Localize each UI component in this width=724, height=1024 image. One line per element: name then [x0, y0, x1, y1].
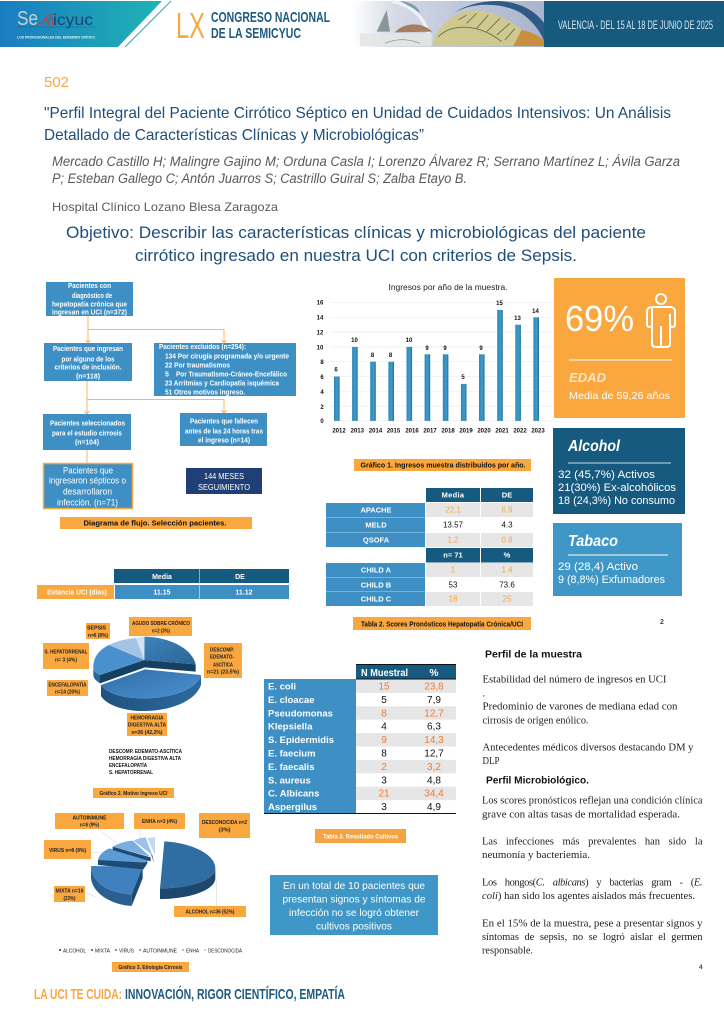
abstract number: 502: [44, 74, 69, 91]
y axis labels: 16: [317, 300, 324, 306]
box: selected patients: Pacientes seleccionados: [50, 420, 125, 428]
table: culture results: Pseudomonas: [268, 708, 333, 719]
flow connectors: [84, 316, 226, 463]
objective: cirrótico ingresado en nuestra UCI con criterios de Sepsis.: [135, 246, 577, 265]
pie legend: DESCONOCIDA: [208, 948, 242, 954]
y axis labels: 2: [320, 405, 324, 411]
box: septic patients: Pacientes que: [63, 466, 113, 476]
table: ICU stay: 11.12: [235, 590, 253, 596]
panel: alcohol: 21(30%) Ex-alcohólicos: [558, 482, 677, 494]
caption: chart 1: Gráfico 1. Ingresos muestra distribuidos por año.: [360, 462, 526, 470]
footer slogan: [34, 985, 345, 1003]
table: culture results: Aspergilus: [268, 802, 317, 813]
page number 4: 4: [699, 964, 703, 971]
table: culture results: E. faecium: [268, 748, 316, 760]
label: mixed: MIXTA n=16: [56, 888, 84, 894]
label: virus: [44, 840, 91, 859]
box: diagnosed patients: hepatopatía crónica que: [52, 302, 127, 308]
x axis labels: 2015: [387, 428, 401, 434]
box: early deaths: el ingreso (n=14): [198, 438, 250, 444]
text block: sample profile: .: [482, 688, 485, 700]
x axis labels: 2021: [495, 428, 509, 434]
text block: microbiological profile: Los scores pronósticos reflejan una condición clínica: [482, 796, 703, 806]
panel: age: EDAD: [569, 370, 607, 385]
table: culture results: C. Albicans: [268, 789, 319, 800]
label: encephalopathy: n=14 (20%): [55, 690, 80, 696]
bar value labels: 10: [406, 338, 413, 344]
table: culture results: 14,3: [424, 735, 444, 746]
y axis labels: 10: [317, 346, 324, 352]
text block: microbiological profile: [482, 776, 703, 956]
bar value labels: 6: [334, 368, 338, 374]
label: edemato-ascitic: DESCOMP.: [210, 648, 234, 654]
bar value labels: [334, 301, 539, 381]
table: culture results: 12,7: [424, 708, 444, 719]
x axis labels: 2020: [477, 428, 491, 434]
table: culture results: 34,4: [424, 789, 444, 800]
y axis labels: [317, 300, 324, 425]
x axis labels: 2013: [351, 428, 365, 434]
pie legend: VIRUS: [119, 948, 134, 954]
text block: microbiological profile: neumonía y bacteriemia.: [482, 850, 590, 861]
table: culture results: 23,8: [424, 682, 444, 692]
label: acute on chronic: [129, 617, 192, 636]
authors: P; Esteban Gallego C; Antón Juarros S; Castrillo Guiral S; Zalba Etayo B.: [52, 171, 467, 186]
box: septic patients: [44, 464, 132, 508]
table: prognostic scores: 0.8: [501, 536, 513, 544]
y axis labels: 12: [317, 330, 324, 336]
panel: age: Media de 59,26 años: [569, 390, 670, 402]
label: edemato-ascitic: EDEMATO-: [210, 654, 234, 660]
x axis labels: 2023: [531, 428, 545, 434]
y axis labels: 6: [320, 375, 324, 381]
label: sepsis: SEPSIS: [87, 626, 106, 632]
table: prognostic scores: [326, 488, 533, 606]
authors: Mercado Castillo H; Malingre Gajino M; Orduna Casla I; Lorenzo Álvarez R; Serrano Martínez L; Ávila Garza: [52, 154, 680, 169]
panel: age: 69%: [565, 298, 634, 339]
box: excluded patients: [154, 343, 296, 396]
table: culture results: 3: [381, 802, 387, 813]
label: upper GI bleed: [127, 713, 167, 736]
callout: negative cultures: presentan signos y síntomas de: [282, 894, 426, 906]
label: acute on chronic: AGUDO SOBRE CRÓNICO: [132, 619, 191, 627]
caption: table 2: [353, 617, 531, 630]
table: prognostic scores: 1.4: [501, 566, 513, 574]
table: culture results: 2: [381, 762, 387, 773]
text block: sample profile: Perfil de la muestra: [485, 650, 582, 660]
x axis labels: 2014: [369, 428, 383, 434]
pie legend: [59, 948, 242, 954]
bar value labels: 8: [371, 353, 375, 359]
table: culture results: Klepsiella: [268, 722, 313, 733]
table: culture results: 4,9: [427, 802, 441, 813]
table: culture results: 4,8: [427, 775, 441, 786]
box: excluded patients: Por Traumatismo-Cráneo-Encefálico: [176, 372, 287, 378]
text block: microbiological profile: síntomas de sepsis, no se logró aislar el germen: [482, 932, 703, 943]
text block: sample profile: Antecedentes médicos diversos destacando DM y: [482, 742, 694, 754]
table: culture results: S. aureus: [268, 775, 311, 786]
table: prognostic scores: 53: [449, 580, 458, 590]
y axis labels: 14: [317, 316, 324, 322]
y axis labels: 0: [320, 419, 324, 425]
congress title: CONGRESO NACIONAL: [211, 9, 330, 26]
header photo: [352, 1, 544, 47]
table: culture results: S. Epidermidis: [268, 735, 334, 746]
label: autoimmune: n=6 (9%): [80, 822, 99, 828]
text block: microbiological profile: grave con altas tasas de mortalidad esperada.: [482, 810, 680, 820]
x axis labels: 2022: [513, 428, 527, 434]
label: NASH: [134, 813, 185, 829]
caption: table 3: Tabla 3. Resultado Cultivos: [323, 834, 398, 840]
label: virus: VIRUS n=8 (9%): [49, 848, 86, 854]
table: prognostic scores: APACHE: [360, 506, 392, 514]
box: excluded patients: 22 Por traumatismos: [165, 362, 230, 370]
congress title: DE LA SEMICYUC: [211, 25, 301, 42]
box: early deaths: antes de las 24 horas tras: [185, 428, 263, 436]
label: edemato-ascitic: n=21 (23,5%): [207, 670, 239, 676]
text block: sample profile: Estabilidad del número de ingresos en UCI: [482, 674, 667, 686]
table: culture results: [264, 664, 456, 814]
label: upper GI bleed: n=26 (42,2%): [132, 730, 163, 736]
bars: [334, 310, 539, 421]
bar value labels: 9: [443, 346, 447, 352]
title: Detallado de Características Clínicas y Microbiológicas”: [44, 127, 424, 144]
caption: flow diagram: [60, 517, 252, 529]
panel: tobacco: [553, 523, 682, 596]
table: ICU stay: DE: [235, 574, 245, 581]
congress title: LX: [176, 5, 205, 46]
callout: negative cultures: cultivos positivos: [316, 920, 392, 932]
x axis labels: 2017: [423, 428, 437, 434]
table: prognostic scores: MELD: [365, 520, 387, 530]
pie legend text: S. HEPATORRENAL: [109, 770, 153, 776]
x axis labels: 2019: [459, 428, 473, 434]
caption: chart 1: [354, 459, 531, 471]
table: ICU stay: 11.15: [153, 590, 171, 596]
pie chart: ICU admission reason: [43, 617, 242, 776]
box: inclusion criteria: Pacientes que ingresan: [53, 346, 123, 353]
box: diagnosed patients: Pacientes con: [68, 283, 111, 290]
label: sepsis: n=6 (8%): [88, 633, 108, 639]
label: alcohol: ALCOHOL n=36 (52%): [186, 910, 235, 916]
text block: sample profile: [482, 650, 694, 767]
icon: person: [647, 294, 675, 347]
pie legend: ALCOHOL: [63, 948, 86, 954]
caption: table 2: Tabla 2. Scores Pronósticos Hepatopatía Crónica/UCI: [361, 622, 523, 628]
congress logo panel: LOS PROFESIONALES DEL ENFERMO CRÍTICO: [17, 34, 96, 40]
label: hepatorenal: S. HEPATORRENAL: [44, 650, 88, 656]
table: prognostic scores: QSOFA: [363, 536, 390, 544]
label: sepsis: [86, 623, 110, 639]
bar value labels: 5: [461, 375, 465, 381]
table: prognostic scores: 4.3: [501, 520, 513, 530]
text block: sample profile: cirrosis de origen enólico.: [482, 716, 588, 726]
box: inclusion criteria: por alguno de los: [62, 356, 115, 364]
box: diagnosed patients: [46, 282, 133, 316]
table: ICU stay: Estancia UCI (días): [47, 590, 107, 596]
table: culture results: E. cloacae: [268, 695, 314, 706]
table: culture results: 4: [381, 722, 387, 733]
text block: sample profile: DLP: [482, 756, 500, 767]
callout: negative cultures: En un total de 10 pacientes que: [283, 880, 425, 892]
label: upper GI bleed: DIGESTIVA ALTA: [128, 722, 166, 728]
text block: sample profile: Predominio de varones de mediana edad con: [482, 702, 678, 712]
title: "Perfil Integral del Paciente Cirrótico Séptico en Unidad de Cuidados Intensivos: Un Análisis: [44, 105, 671, 122]
box: follow-up: SEGUIMIENTO: [198, 483, 250, 492]
pie chart: cirrhosis etiology: [44, 813, 250, 954]
table: ICU stay: Media: [152, 574, 172, 581]
table: culture results: 6,3: [427, 722, 441, 733]
title: [44, 105, 671, 144]
bar value labels: 14: [532, 309, 539, 315]
label: acute on chronic: n=2 (3%): [152, 628, 170, 634]
bar value labels: 15: [496, 301, 503, 307]
congress title: [176, 5, 330, 46]
pie legend text: DESCOMP. EDEMATO-ASCÍTICA: [109, 747, 183, 755]
box: inclusion criteria: (n=118): [76, 374, 100, 380]
table: prognostic scores: 6.9: [501, 506, 513, 514]
table: prognostic scores: DE: [502, 490, 512, 500]
table: culture results: 3: [381, 775, 387, 786]
bar value labels: 8: [389, 353, 393, 359]
objective: [66, 223, 646, 265]
table: prognostic scores: CHILD C: [361, 594, 392, 604]
box: selected patients: (n=104): [75, 440, 99, 446]
footer slogan: LA UCI TE CUIDA:: [34, 986, 122, 1003]
table: prognostic scores: 13.57: [443, 520, 464, 530]
table: culture results: 8: [381, 748, 387, 760]
panel: alcohol: [553, 428, 685, 514]
box: diagnosed patients: diagnóstico de: [72, 293, 112, 300]
panel: tobacco: 29 (28,4) Activo: [558, 561, 638, 573]
panel: age: [554, 278, 685, 418]
bar value labels: 13: [514, 316, 521, 322]
text block: microbiological profile: Perfil Microbiológico.: [486, 776, 589, 786]
table: prognostic scores: 25: [503, 594, 512, 604]
pie legend: ENHA: [186, 948, 199, 954]
box: follow-up: 144 MESES: [204, 472, 244, 481]
label: encephalopathy: [47, 680, 88, 696]
table: ICU stay: [37, 569, 289, 599]
table: prognostic scores: 22.1: [445, 506, 461, 514]
text block: microbiological profile: responsable.: [482, 946, 533, 956]
callout: negative cultures: infección no se logró obtener: [289, 907, 419, 919]
label: autoimmune: [55, 813, 124, 829]
x axis labels: 2012: [332, 428, 346, 434]
table: culture results: 9: [381, 735, 387, 746]
bar value labels: 9: [479, 346, 483, 352]
label: alcohol: [174, 906, 246, 917]
table: culture results: E. faecalis: [268, 762, 314, 773]
table: culture results: E. coli: [268, 682, 296, 692]
box: excluded patients: 23 Arritmias y Cardiopatía isquémica: [165, 380, 279, 388]
label: unknown: DESCONOCIDA n=2: [202, 820, 247, 826]
table: prognostic scores: CHILD B: [361, 580, 392, 590]
pie legend text: ENCEFALOPATÍA: [109, 761, 148, 769]
3D pie: [85, 828, 217, 907]
box: excluded patients: 51 Otros motivos ingreso.: [165, 390, 245, 396]
x axis labels: [332, 428, 545, 434]
label: hepatorenal: [43, 643, 89, 669]
congress date panel: [544, 1, 724, 47]
table: prognostic scores: 73.6: [499, 580, 515, 590]
congress logo panel: icyuc: [53, 12, 93, 29]
text block: microbiological profile: Las infecciones más prevalentes han sido la: [482, 836, 703, 848]
congress logo panel: Se: [17, 8, 38, 30]
table: culture results: 15: [378, 682, 390, 692]
text block: microbiological profile: coli) han sido los agentes aislados más frecuentes.: [482, 891, 695, 902]
header banner: [0, 0, 724, 47]
table: prognostic scores: 1: [451, 566, 456, 574]
label: encephalopathy: ENCEFALOPATÍA: [48, 680, 86, 688]
objective: Objetivo: Describir las características clínicas y microbiológicas del paciente: [66, 223, 646, 242]
pie legend: MIXTA: [95, 948, 110, 954]
caption: chart 3: [112, 962, 189, 972]
box: diagnosed patients: ingresan en UCI (n=372): [52, 310, 127, 316]
label: autoimmune: AUTOINMUNE: [72, 816, 107, 822]
label: unknown: (3%): [219, 828, 231, 834]
bar value labels: 9: [425, 346, 429, 352]
callout: negative cultures: [270, 875, 438, 935]
authors: [52, 154, 680, 186]
y axis labels: 4: [320, 390, 324, 396]
table: culture results: N Muestral: [361, 668, 408, 679]
table: culture results: %: [430, 668, 439, 679]
label: mixed: (23%): [64, 896, 76, 902]
text block: microbiological profile: Los hongos(C. albicans) y bacterias gram - (E.: [482, 878, 702, 888]
label: edemato-ascitic: ASCÍTICA: [213, 660, 233, 668]
box: septic patients: desarrollaron: [63, 486, 112, 498]
label: NASH: ENHA n=3 (4%): [142, 819, 177, 825]
table: culture results: 7,9: [427, 695, 441, 706]
panel: tobacco: 9 (8,8%) Exfumadores: [558, 574, 665, 586]
box: follow-up: [186, 468, 262, 494]
table: culture results: 21: [378, 789, 390, 800]
pie legend: AUTOINMUNE: [143, 948, 177, 954]
label: edemato-ascitic: [204, 643, 242, 678]
x axis labels: 2018: [441, 428, 455, 434]
box: inclusion criteria: criterios de inclusión.: [54, 364, 122, 372]
caption: chart 3: Gráfico 3. Etiología Cirrosis: [118, 965, 182, 971]
flow diagram: [43, 282, 296, 529]
table: culture results: 12,7: [424, 748, 444, 760]
panel: alcohol: 32 (45,7%) Activos: [558, 469, 656, 481]
hospital: Hospital Clínico Lozano Blesa Zaragoza: [52, 200, 278, 214]
panel: tobacco: Tabaco: [568, 533, 618, 550]
text block: microbiological profile: En el 15% de la muestra, pese a presentar signos y: [482, 918, 703, 930]
box: early deaths: [180, 413, 267, 446]
bar value labels: 10: [351, 338, 358, 344]
table: prognostic scores: 1.2: [447, 536, 459, 544]
box: selected patients: para el estudio cirrosis: [52, 430, 122, 438]
caption: flow diagram: Diagrama de flujo. Selección pacientes.: [84, 520, 227, 528]
table: prognostic scores: n= 71: [443, 550, 463, 560]
table: prognostic scores: %: [504, 550, 511, 560]
box: selected patients: [43, 414, 131, 450]
table: prognostic scores: 18: [449, 594, 458, 604]
box: early deaths: Pacientes que fallecen: [190, 418, 258, 426]
box: excluded patients: 5: [165, 372, 169, 378]
caption: chart 2: [93, 788, 174, 798]
table: prognostic scores: Media: [442, 490, 465, 500]
table: culture results: 8: [381, 708, 387, 719]
table: culture results: 3,2: [427, 762, 441, 773]
table: culture results: 5: [381, 695, 387, 706]
3D pie: [93, 637, 201, 711]
page number 2: 2: [660, 619, 664, 626]
box: septic patients: ingresaron sépticos o: [49, 476, 126, 486]
footer slogan: INNOVACIÓN, RIGOR CIENTÍFICO, EMPATÍA: [125, 985, 345, 1003]
pie legend text: [109, 747, 183, 776]
x axis labels: 2016: [405, 428, 419, 434]
box: inclusion criteria: [44, 343, 132, 381]
label: mixed: [54, 886, 85, 902]
label: unknown: [199, 813, 250, 838]
panel: alcohol: Alcohol: [567, 438, 620, 455]
table: prognostic scores: CHILD A: [361, 566, 392, 574]
pie legend text: HEMORRAGIA DIGESTIVA ALTA: [109, 756, 182, 762]
box: excluded patients: 134 Por cirugía programada y/o urgente: [165, 354, 289, 360]
panel: alcohol: 18 (24,3%) No consumo: [558, 495, 675, 507]
bar chart: admissions per year: [317, 283, 552, 434]
box: excluded patients: Pacientes excluidos (n=254):: [159, 344, 246, 351]
congress logo panel: [0, 1, 171, 47]
caption: chart 2: Gráfico 2. Motivo ingreso UCI: [100, 791, 168, 797]
box: septic patients: infección. (n=71): [57, 498, 118, 508]
caption: table 3: [315, 829, 406, 843]
y axis labels: 8: [320, 360, 324, 366]
chart title: Ingresos por año de la muestra.: [388, 283, 508, 292]
label: hepatorenal: n= 3 (4%): [55, 658, 77, 664]
label: upper GI bleed: HEMORRAGIA: [130, 716, 164, 722]
